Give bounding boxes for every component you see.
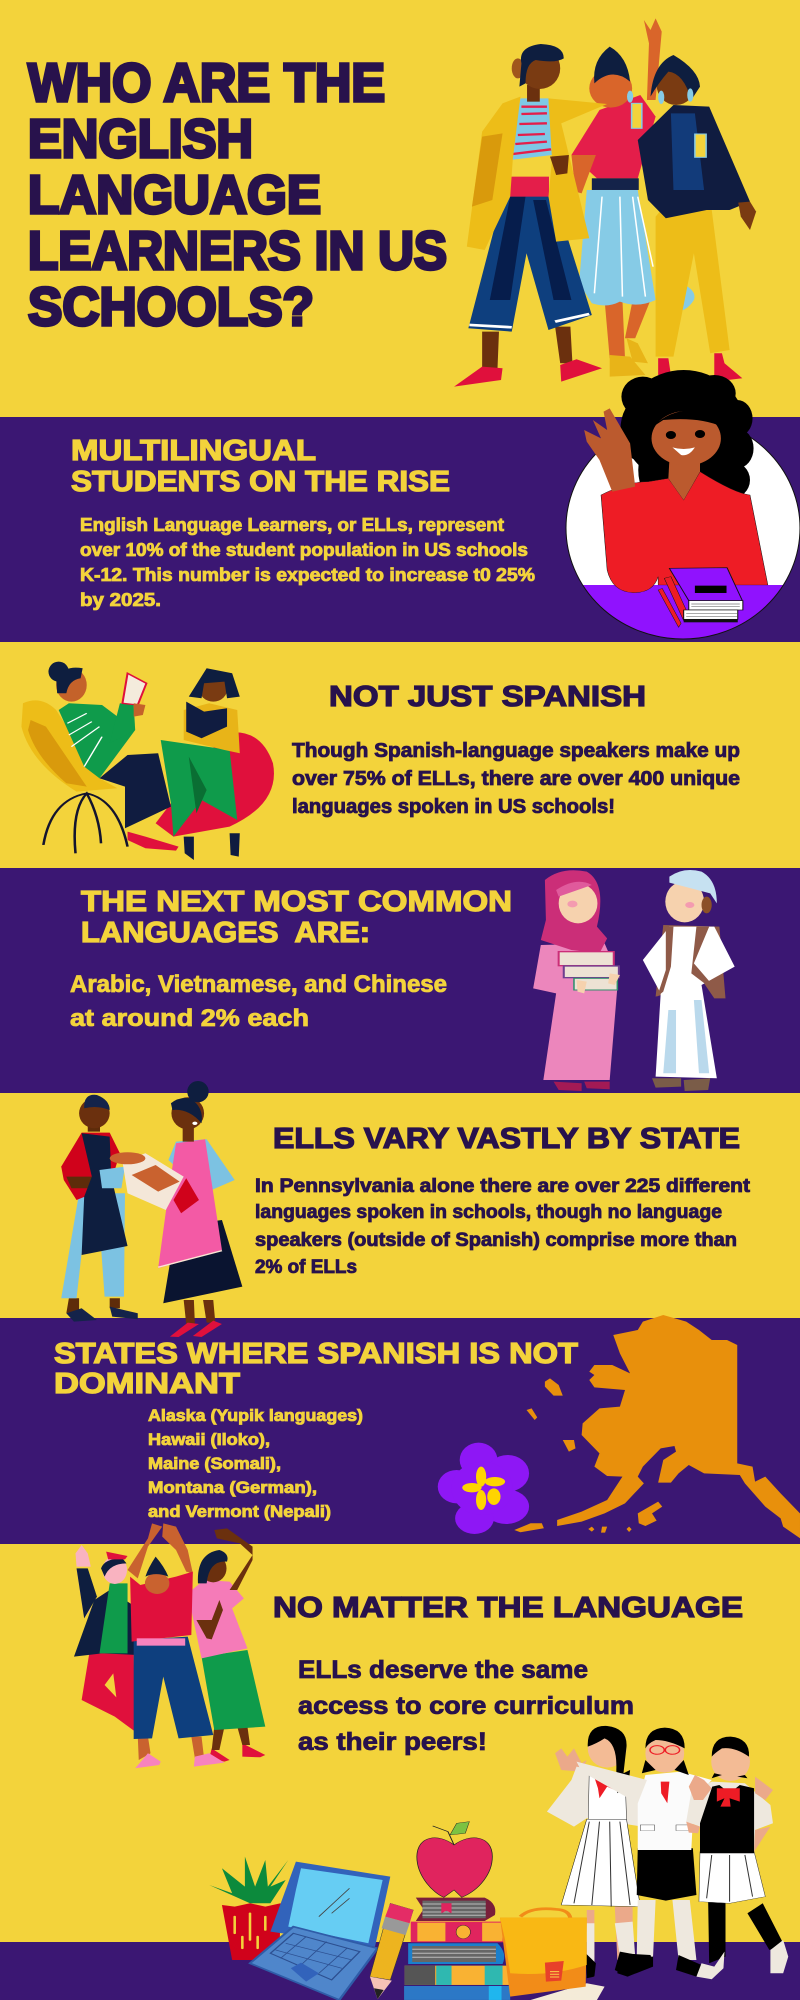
circle backdrop — [566, 438, 800, 638]
text block: states list: Hawaii (Iloko), — [148, 1431, 270, 1449]
text block: multilingual body: over 10% of the student population in US schools — [80, 540, 528, 560]
illustration: girl and boy students — [533, 870, 735, 1091]
text block: not just spanish body: over 75% of ELLs, there are over 400 unique — [292, 768, 740, 790]
text block: states list: Alaska (Yupik languages) — [148, 1407, 363, 1425]
text block: core curriculum: access to core curriculum — [298, 1692, 634, 1720]
panel: no matter the language — [0, 1544, 800, 1942]
illustration: waving woman with books in circle — [560, 370, 800, 645]
icon: book stack — [404, 1898, 510, 2000]
heading: states where spanish is not dominant — [54, 1338, 578, 1400]
text block: states list: and Vermont (Nepali) — [148, 1503, 331, 1521]
heading: ells vary by state: ELLS VARY VASTLY BY STATE — [273, 1123, 740, 1155]
icon: purple flower — [438, 1443, 529, 1534]
title: LANGUAGE — [28, 165, 321, 225]
heading: not just spanish: NOT JUST SPANISH — [329, 681, 646, 713]
text block: states list: Maine (Somali), — [148, 1455, 281, 1473]
heading: multilingual students: STUDENTS ON THE RISE — [71, 466, 450, 498]
icon: yellow satchel — [500, 1909, 587, 1997]
text block: multilingual body: K-12. This number is expected to increase t0 25% — [80, 565, 535, 585]
text block: pennsylvania: speakers (outside of Spanish) comprise more than — [255, 1230, 737, 1251]
text block: not just spanish body: Though Spanish-language speakers make up — [292, 740, 740, 762]
map: alaska — [514, 1315, 800, 1538]
icon: apple — [417, 1822, 492, 1897]
text block: core curriculum: as their peers! — [298, 1728, 487, 1756]
panel: title banner — [0, 0, 800, 417]
icon: laptop — [250, 1862, 390, 2000]
title: SCHOOLS? — [28, 277, 314, 337]
title — [28, 53, 447, 337]
text block: core curriculum — [298, 1656, 634, 1756]
text block: languages list: at around 2% each — [70, 1005, 309, 1032]
heading: next most common languages: LANGUAGES ARE: — [81, 917, 370, 949]
heading: states where spanish is not dominant: DOMINANT — [54, 1368, 240, 1400]
panel: multilingual students — [0, 417, 800, 642]
title: WHO ARE THE — [28, 53, 385, 113]
panel: ells vary by state — [0, 1093, 800, 1318]
heading: no matter the language: NO MATTER THE LANGUAGE — [273, 1592, 743, 1624]
text block: pennsylvania — [255, 1176, 751, 1278]
text block: multilingual body — [80, 515, 535, 610]
text block: multilingual body: by 2025. — [80, 590, 161, 610]
illustration: two cooks with jar — [61, 1081, 242, 1337]
text block: pennsylvania: languages spoken in schools, though no language — [255, 1202, 722, 1223]
icon: potted plant — [209, 1857, 288, 1960]
text block: multilingual body: English Language Learners, or ELLs, represent — [80, 515, 504, 535]
text block: languages list: Arabic, Vietnamese, and Chinese — [70, 971, 447, 998]
footer band — [0, 1942, 800, 2000]
text block: pennsylvania: In Pennsylvania alone there are over 225 different — [255, 1176, 751, 1197]
girl: middle — [577, 1728, 712, 1977]
heading: states where spanish is not dominant: STATES WHERE SPANISH IS NOT — [54, 1338, 578, 1370]
panel: states where spanish is not dominant — [0, 1318, 800, 1544]
illustration: uniformed schoolgirls — [547, 1726, 788, 1979]
girl: right — [686, 1737, 788, 1979]
text block: core curriculum: ELLs deserve the same — [298, 1656, 588, 1684]
text block: states list: Montana (German), — [148, 1479, 317, 1497]
illustration: two women reading — [21, 662, 274, 860]
panel: not just spanish — [0, 642, 800, 868]
illustration: three friends — [454, 18, 756, 387]
illustration: dancing trio — [74, 1523, 265, 1768]
icon: paper sheets — [531, 1983, 605, 2000]
title: ENGLISH — [28, 109, 253, 169]
panel: next most common languages — [0, 868, 800, 1093]
girl: left — [547, 1726, 653, 1978]
text block: pennsylvania: 2% of ELLs — [255, 1257, 357, 1278]
text block: languages list — [70, 971, 447, 1032]
icon: pencil — [370, 1903, 413, 1999]
illustration: school supplies — [209, 1822, 605, 2000]
heading: multilingual students: MULTILINGUAL — [71, 435, 316, 467]
text block: states list — [148, 1407, 363, 1521]
title: LEARNERS IN US — [28, 221, 447, 281]
heading: multilingual students — [71, 435, 450, 498]
text block: not just spanish body — [292, 740, 740, 818]
text block: not just spanish body: languages spoken in US schools! — [292, 796, 615, 818]
heading: next most common languages: THE NEXT MOST COMMON — [81, 886, 512, 918]
heading: next most common languages — [81, 886, 512, 949]
